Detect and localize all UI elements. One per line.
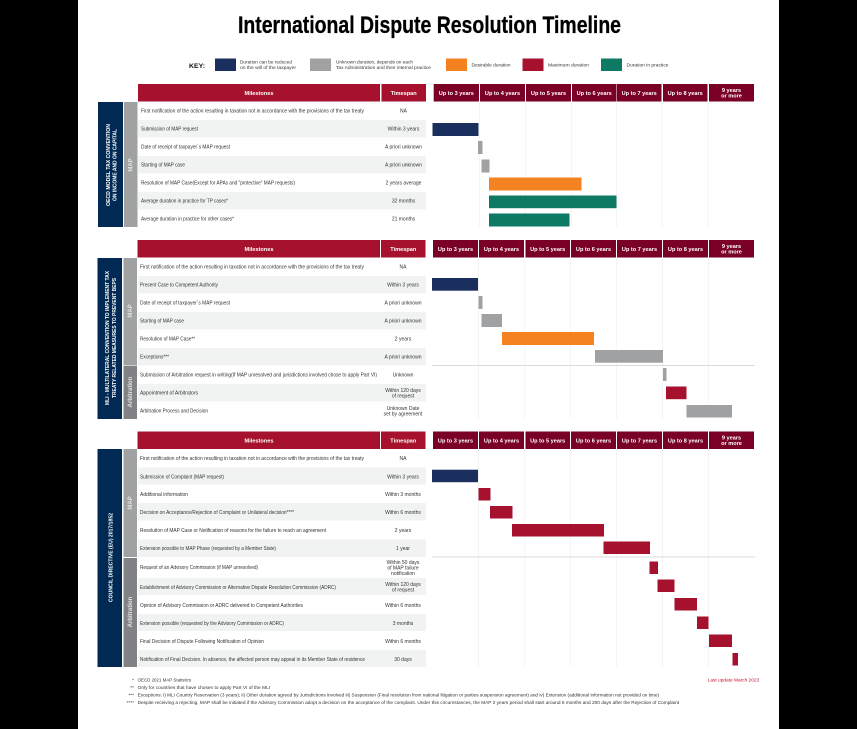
milestone rows: A priori unknown <box>385 144 422 150</box>
milestone rows: Exceptions*** <box>140 354 169 360</box>
timespan header <box>381 432 426 449</box>
convention side label: ON INCOME AND ON CAPITAL <box>113 128 119 201</box>
milestone rows: Resolution of MAP Case(Except for APAs and "protective" MAP requests) <box>141 180 295 186</box>
milestone rows: 2 years average <box>386 180 422 186</box>
grid lines <box>478 449 708 667</box>
milestone rows: A priori unknown <box>385 162 422 168</box>
key legend: Tax Administration and their internal practice <box>336 65 431 70</box>
year headers: Up to 6 years <box>577 91 612 97</box>
arbitration side label: Arbitration <box>128 596 134 627</box>
milestone rows: 21 months <box>392 216 416 222</box>
milestone rows: Within 50 days <box>387 560 420 566</box>
milestone rows: A priori unknown <box>385 354 422 360</box>
year headers: Up to 8 years <box>668 91 703 97</box>
milestone rows <box>138 456 426 667</box>
footnotes <box>127 678 680 706</box>
milestone rows: Decision on Acceptance/Rejection of Complaint or Unilateral decision**** <box>140 510 294 516</box>
footnotes: Exceptions: i) MLI Country Reservation (3 years); ii) Other duration agreed by Jurisdictions involved iii) Suspension (Final resolution from national litigation or parties suspension agreement) and iv) Extension (additional information not provided on time) <box>138 692 659 698</box>
year headers: Up to 8 years <box>668 438 703 444</box>
milestone rows: notification <box>391 571 415 577</box>
convention side label: MLI - MULTILATERAL CONVENTION TO IMPLEMENT TAX <box>105 271 111 405</box>
grid lines <box>480 102 708 227</box>
milestone rows: 3 months <box>393 621 414 627</box>
convention side label <box>98 102 123 227</box>
timespan header: Timespan <box>391 91 417 97</box>
year headers: Up to 6 years <box>576 438 611 444</box>
milestone rows <box>138 108 426 222</box>
timespan header: Timespan <box>390 438 417 444</box>
milestone rows: Date of receipt of taxpayer´s MAP request <box>140 300 231 306</box>
milestone rows: of request <box>392 394 415 400</box>
milestone rows: Within 3 years <box>388 126 420 132</box>
year headers: Up to 3 years <box>438 247 473 253</box>
footnotes: OECD 2021 MAP Statistics <box>138 678 192 684</box>
convention side label <box>98 449 122 667</box>
milestone rows: NA <box>400 108 408 114</box>
milestones header: Milestones <box>245 438 273 444</box>
milestone rows: NA <box>400 456 407 462</box>
MAP side label: MAP <box>128 158 134 172</box>
gantt bars <box>432 470 738 666</box>
milestones header <box>138 240 380 258</box>
key legend: Unknown duration, depends on each <box>336 60 413 64</box>
milestone rows: Notification of Final Decision. In absence, the affected person may appeal in its Member State of residence <box>140 657 365 663</box>
milestone rows: Date of receipt of taxpayer´s MAP request <box>141 144 231 150</box>
milestone rows: Establishment of Advisory Commission or Alternative Dispute Resolution Commission (ADRC) <box>140 585 336 591</box>
year headers: Up to 4 years <box>484 438 519 444</box>
milestone rows: 32 months <box>392 198 416 204</box>
milestone rows: First notification of the action resulting in taxation not in accordance with the provisions of the tax treaty <box>140 456 364 462</box>
milestone rows: Within 6 months <box>385 603 421 609</box>
panel: MLI multilateral convention <box>98 240 755 419</box>
MAP side label: MAP <box>128 304 134 318</box>
milestone rows: Resolution of MAP Case or Notification of reasons for the failure to reach an agreement <box>140 528 327 534</box>
footnotes: * <box>132 678 134 684</box>
milestone rows: Arbitration Process and Decision <box>140 408 208 414</box>
arbitration side label <box>124 366 137 419</box>
year headers: Up to 7 years <box>622 438 657 444</box>
year headers: Up to 7 years <box>622 91 657 97</box>
convention side label: COUNCIL DIRECTIVE (EU) 2017/1852 <box>108 513 114 602</box>
milestone rows <box>138 264 426 418</box>
milestone rows: Average duration in practice for TP cases* <box>141 198 228 204</box>
key legend: Duration in practice <box>626 62 669 68</box>
milestone rows: Appointment of Arbitrators <box>140 390 198 396</box>
milestone rows: Request of an Advisory Commission (if MAP unresolved) <box>140 565 258 571</box>
footnotes: Only for countries that have chosen to apply Part VI of the MLI <box>138 685 270 691</box>
arbitration side label <box>124 558 137 667</box>
milestone rows: Opinion of Advisory Commission or ADRC delivered to Competent Authorities <box>140 603 303 609</box>
milestone rows: NA <box>400 264 407 270</box>
gantt bars <box>432 123 616 226</box>
milestone rows: 1 year <box>396 546 410 552</box>
year headers: Up to 5 years <box>531 91 566 97</box>
milestone rows: 2 years <box>395 528 412 534</box>
MAP side label <box>124 449 137 557</box>
MAP side label <box>124 102 138 227</box>
year headers: Up to 7 years <box>622 247 657 253</box>
gantt bars <box>432 278 732 418</box>
milestone rows: Extension possible to MAP Phase (requested by a Member State) <box>140 546 276 552</box>
year headers: 9 years <box>722 88 741 94</box>
milestone rows: Final Decision of Dispute Following Notification of Opinion <box>140 639 264 645</box>
year headers <box>433 240 754 258</box>
milestone rows: Resolution of MAP Case** <box>140 336 195 342</box>
milestone rows: Submission of MAP request <box>141 126 199 132</box>
convention side label: OECD MODEL TAX CONVENTION <box>106 124 112 206</box>
year headers: Up to 5 years <box>530 247 565 253</box>
MAP and arbitration divider <box>432 556 755 558</box>
year headers <box>433 432 754 449</box>
panel: Council Directive (EU) 2017/1852 <box>98 432 755 667</box>
milestone rows: Within 120 days <box>385 388 421 394</box>
milestone rows: Within 3 months <box>385 492 421 498</box>
MAP and arbitration divider <box>432 364 755 366</box>
arbitration side label: Arbitration <box>128 376 134 407</box>
milestone rows: 30 days <box>394 657 412 663</box>
year headers: Up to 3 years <box>439 91 474 97</box>
milestone rows: of MAP failure <box>387 565 419 571</box>
milestone rows: Starting of MAP case <box>141 162 185 168</box>
milestone rows: Submission of Arbitration request in writing(If MAP unresolved and jurisdictions involved chose to apply Part VI) <box>140 372 377 378</box>
milestones header <box>138 84 380 102</box>
milestone rows: Average duration in practice for other cases* <box>141 216 234 222</box>
year headers: Up to 5 years <box>530 438 565 444</box>
convention side label <box>98 258 122 419</box>
milestone rows: Present Case to Competent Authority <box>140 282 218 288</box>
MAP side label <box>124 258 137 366</box>
milestone rows: A priori unknown <box>385 318 422 324</box>
milestone rows: of request <box>392 588 415 594</box>
milestones header <box>138 432 380 449</box>
milestone rows: Unknown Date <box>387 406 420 412</box>
milestone rows: Unknown <box>393 372 414 378</box>
milestone rows: Within 6 months <box>385 639 421 645</box>
milestone rows: 2 years <box>395 336 412 342</box>
year headers: Up to 4 years <box>484 247 519 253</box>
timespan header <box>382 84 426 102</box>
timespan header <box>381 240 426 258</box>
year headers: 9 years <box>722 435 741 441</box>
footnotes: **** <box>127 700 134 706</box>
key legend <box>189 58 669 71</box>
year headers: Up to 4 years <box>485 91 520 97</box>
year headers <box>434 84 754 102</box>
MAP side label: MAP <box>128 496 134 510</box>
year headers: Up to 8 years <box>668 247 703 253</box>
year headers: or more <box>721 250 742 256</box>
key legend: Maximum duration <box>548 62 589 68</box>
milestone rows: First notification of the action resulting in taxation not in accordance with the provisions of the tax treaty <box>140 264 364 270</box>
timespan header: Timespan <box>390 247 417 253</box>
milestone rows: Within 3 years <box>387 282 419 288</box>
key legend: KEY: <box>189 63 205 70</box>
year headers: or more <box>721 94 742 100</box>
milestone rows: A priori unknown <box>385 300 422 306</box>
milestone rows: Additional information <box>140 492 188 498</box>
milestone rows: Within 120 days <box>385 582 421 588</box>
footnotes: *** <box>128 692 134 698</box>
milestone rows: Extension possible (requested by the Advisory Commission or ADRC) <box>140 621 284 627</box>
year headers: 9 years <box>722 244 741 250</box>
milestone rows: Submission of Complaint (MAP request) <box>140 474 224 480</box>
milestones header: Milestones <box>245 91 273 97</box>
last update note: Last update March 2023 <box>708 678 760 684</box>
milestone rows: Within 3 years <box>387 474 419 480</box>
year headers: or more <box>721 441 742 447</box>
key legend: on the will of the taxpayer <box>240 65 297 70</box>
footnotes: ** <box>130 685 134 691</box>
key legend: Desirable duration <box>472 62 511 68</box>
key legend: Duration can be reduced <box>240 60 292 64</box>
milestone rows: First notification of the action resulting in taxation not in accordance with the provisions of the tax treaty <box>141 108 364 114</box>
milestones header: Milestones <box>245 247 273 253</box>
year headers: Up to 6 years <box>576 247 611 253</box>
milestone rows: set by agreement <box>384 412 423 418</box>
milestone rows: Starting of MAP case <box>140 318 184 324</box>
convention side label: TREATY RELATED MEASURES TO PREVENT BEPS <box>112 278 118 398</box>
panel: OECD model tax convention <box>98 84 754 227</box>
title: International Dispute Resolution Timeline <box>238 12 621 39</box>
year headers: Up to 3 years <box>438 438 473 444</box>
footnotes: Despite receiving a rejecting, MAP shall be initiated if the Advisory Commission adopt a decision on the acceptance of the complaint. Under this circumstances, the MAP 2 years period shall start around 6 months and 200 days after the Rejection of Complaint <box>138 700 680 706</box>
grid lines <box>478 258 708 419</box>
milestone rows: Within 6 months <box>385 510 421 516</box>
